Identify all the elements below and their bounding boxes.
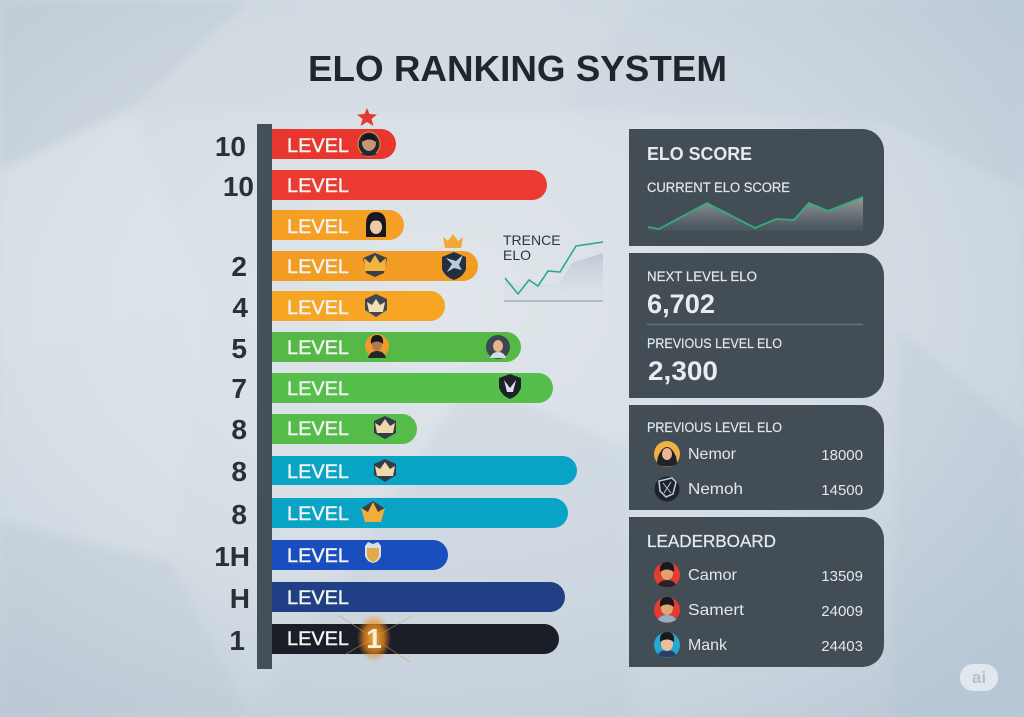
rank labels: 10 — [215, 131, 246, 162]
rank labels: 8 — [231, 456, 247, 487]
icon: crown badge bar 9 — [374, 459, 396, 482]
bar labels: LEVEL — [287, 378, 349, 400]
row: Samert: Samert — [688, 602, 745, 619]
sparkline — [648, 197, 863, 231]
icon: crown badge bar 5 — [365, 294, 387, 317]
row: Camor: 13509 — [821, 568, 863, 585]
bar labels: LEVEL — [287, 216, 349, 238]
heading: PREVIOUS LEVEL ELO — [647, 420, 782, 435]
watermark badge: ai — [972, 668, 986, 687]
icon: glowing number one — [338, 614, 412, 662]
row: Nemoh: Nemoh — [688, 481, 743, 498]
bar 3 — [272, 210, 404, 240]
rank labels: 10 — [223, 171, 254, 202]
bar labels: LEVEL — [287, 418, 349, 440]
row: Camor: Camor — [688, 567, 738, 584]
row: Nemoh: 14500 — [821, 482, 863, 499]
bar 11 — [272, 540, 448, 570]
watermark badge — [960, 664, 998, 691]
bar labels: LEVEL — [287, 297, 349, 319]
chart line — [505, 242, 603, 294]
chart baseline — [504, 300, 603, 302]
bar labels: LEVEL — [287, 461, 349, 483]
panel: elo score — [629, 129, 884, 246]
bar 12 — [272, 582, 565, 612]
rank labels: 7 — [231, 373, 247, 404]
panel: leaderboard — [629, 517, 884, 667]
icon: avatar bar 6 left — [365, 334, 389, 358]
row: Samert: 24009 — [821, 603, 863, 620]
icon: emblem bar 7 — [499, 374, 521, 399]
rank labels: 8 — [231, 414, 247, 445]
rank labels: 2 — [231, 251, 247, 282]
bar 5 — [272, 291, 445, 321]
bar 6 — [272, 332, 521, 362]
bar labels: LEVEL — [287, 337, 349, 359]
row: Mank: 24403 — [821, 638, 863, 655]
bar 2 — [272, 170, 547, 200]
bar 10 — [272, 498, 568, 528]
icon: crown badge bar 8 — [374, 416, 396, 439]
previous level value: 2,300 — [648, 356, 718, 386]
icon: avatar bar 6 right — [486, 335, 510, 359]
bar 1 — [272, 129, 396, 159]
row: Mank: Mank — [688, 637, 728, 654]
row: Nemor: Nemor — [688, 446, 737, 463]
bar labels: LEVEL — [287, 545, 349, 567]
rank labels: 5 — [231, 333, 247, 364]
level bars — [272, 129, 577, 654]
icon: red star — [357, 108, 377, 126]
bar 13 — [272, 624, 559, 654]
bar 4 — [272, 251, 478, 281]
row: Nemoh — [654, 476, 863, 502]
icon: gold crown bar 10 — [361, 501, 385, 522]
heading: ELO SCORE — [647, 144, 752, 164]
bar 7 — [272, 373, 553, 403]
row: Samert — [654, 597, 863, 623]
rank labels: 1H — [214, 541, 250, 572]
bar labels: LEVEL — [287, 256, 349, 278]
trend chart — [503, 232, 603, 301]
rank labels: 1 — [229, 625, 245, 656]
previous level label: PREVIOUS LEVEL ELO — [647, 336, 782, 351]
icon: shield bar 4 — [442, 252, 466, 280]
bar 9 — [272, 456, 577, 485]
title: ELO RANKING SYSTEM — [308, 48, 727, 89]
chart label: TRENCE — [503, 232, 561, 248]
row: Camor — [654, 562, 863, 588]
rank labels: 4 — [232, 292, 248, 323]
heading: LEADERBOARD — [647, 531, 776, 551]
next level value: 6,702 — [647, 289, 715, 319]
rank labels — [214, 131, 254, 656]
panel: level elo — [629, 253, 884, 398]
row: Mank — [654, 632, 863, 658]
row: Nemor: 18000 — [821, 447, 863, 464]
bar labels — [287, 135, 349, 650]
bar labels: LEVEL — [287, 587, 349, 609]
icon: avatar bar 3 — [366, 212, 386, 237]
rank labels: 8 — [231, 499, 247, 530]
icon: small crown — [443, 234, 463, 248]
bar 8 — [272, 414, 417, 444]
bar labels: LEVEL — [287, 503, 349, 525]
panel: previous level list — [629, 405, 884, 510]
icon: gold shield bar 11 — [365, 542, 381, 563]
subheading: CURRENT ELO SCORE — [647, 180, 790, 195]
icon: crown bar 4 — [363, 253, 387, 277]
bar labels: LEVEL — [287, 175, 349, 197]
chart label: ELO — [503, 247, 531, 263]
bar labels: LEVEL — [287, 628, 349, 650]
bar labels: LEVEL — [287, 135, 349, 157]
icon: avatar bar 1 — [358, 132, 380, 156]
chart area — [505, 253, 603, 300]
icon: glowing number one: 1 — [366, 623, 382, 654]
vertical axis — [257, 124, 272, 669]
next level label: NEXT LEVEL ELO — [647, 269, 757, 284]
rank labels: H — [230, 583, 250, 614]
row: Nemor — [654, 441, 863, 467]
